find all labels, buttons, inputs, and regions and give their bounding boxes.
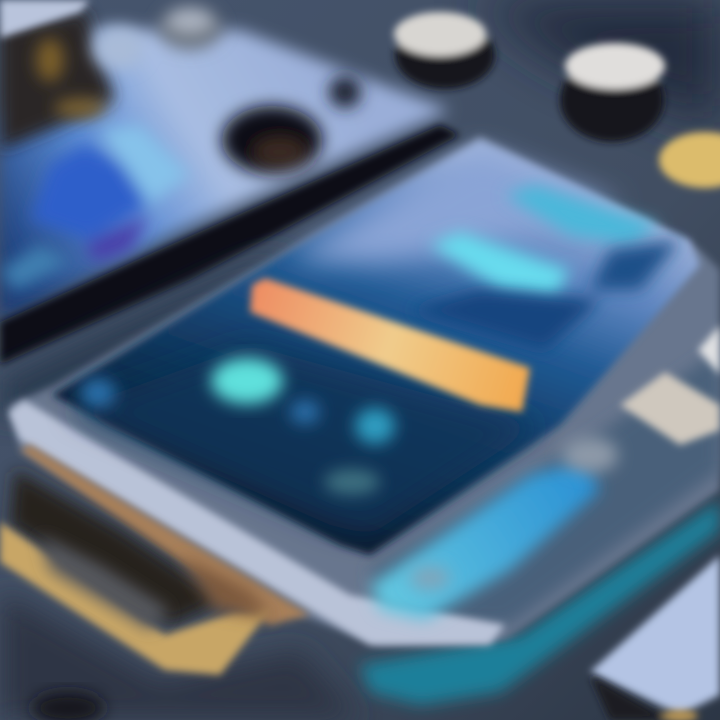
main screen (52, 140, 700, 555)
light bright frame lower edge (8, 400, 505, 645)
teal back edge (360, 500, 720, 705)
main phone (0, 135, 720, 705)
top-left phone white corner (0, 0, 90, 38)
white round component right (560, 43, 665, 142)
blue app panel (0, 125, 190, 292)
dark top-right corner (470, 0, 720, 130)
cyan bar middle (430, 232, 570, 298)
camera module (222, 76, 361, 174)
grey buttons (410, 437, 618, 590)
small dots (80, 378, 395, 495)
white round component (394, 12, 495, 89)
gold band (0, 522, 270, 675)
gold glints on corner (36, 38, 106, 118)
gold component (659, 132, 720, 188)
device light panel (590, 555, 720, 715)
frame grey right (370, 350, 720, 625)
silver frame (10, 135, 720, 645)
bottom-left dark surface (0, 590, 360, 720)
copper strip (180, 555, 275, 620)
small components (92, 6, 222, 70)
white square component (620, 325, 720, 445)
dark lower screen glow (70, 345, 540, 535)
black phone edge (0, 125, 460, 365)
dark bottom component (32, 692, 104, 720)
orange bar (250, 278, 530, 412)
dark blue right panels (410, 240, 680, 350)
device dark base (590, 675, 698, 720)
dark gap below top phone (0, 250, 300, 420)
dark recess (10, 470, 225, 625)
light upper screen (290, 150, 620, 262)
top-left phone (0, 0, 460, 365)
bottom-right device (590, 555, 720, 720)
cyan bar top (505, 185, 660, 245)
blue bottom panel (370, 460, 600, 620)
top-left phone screen (0, 30, 450, 320)
copper edge (20, 445, 310, 625)
cyan dot (211, 358, 283, 404)
top-left phone dark corner (0, 10, 115, 150)
grey inner tray (40, 535, 170, 630)
gold frame lower left (0, 470, 275, 675)
